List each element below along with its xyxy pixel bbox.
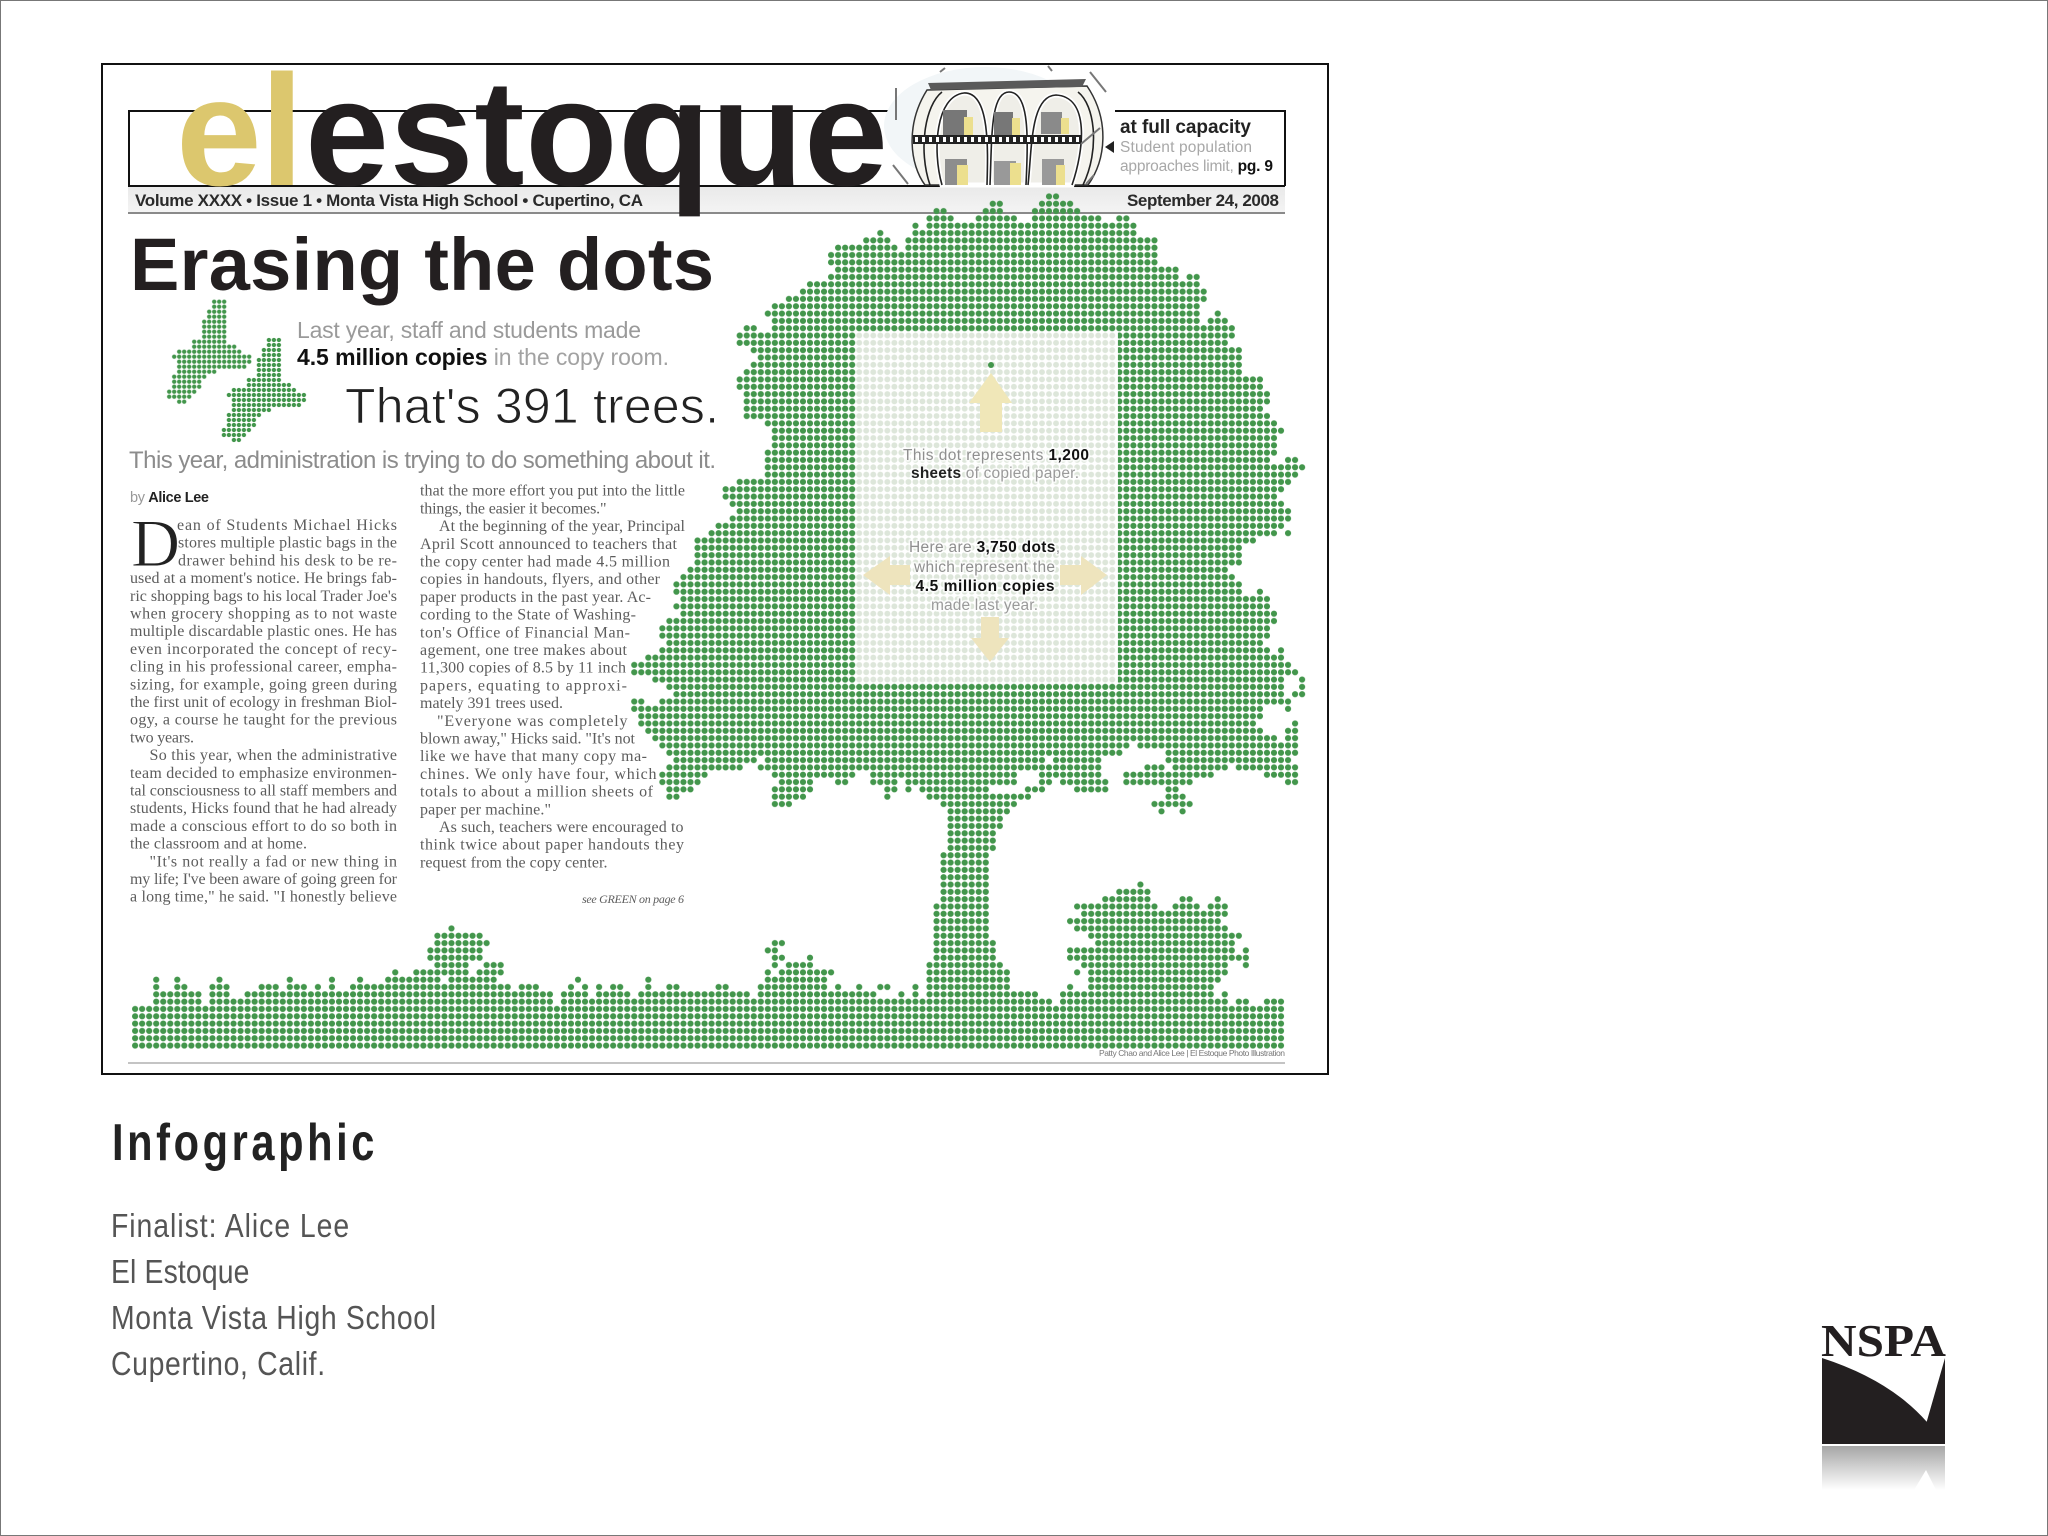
callout: 3,750 dots equal 4.5 million copies: made last year. xyxy=(931,597,1038,614)
article column two: that the more effort you put into the little xyxy=(420,483,685,500)
article column two: copies in handouts, flyers, and other xyxy=(420,571,661,588)
article column one: the first unit of ecology in freshman Biol- xyxy=(130,694,397,711)
volume and issue line: Volume XXXX • Issue 1 • Monta Vista High School • Cupertino, CA xyxy=(135,191,643,210)
bush dots xyxy=(1060,881,1249,998)
panel: newspaper page frame xyxy=(102,64,1328,1074)
article column one: ogy, a course he taught for the previous xyxy=(130,712,397,729)
panel: pale field of 3,750 dots xyxy=(856,332,1118,683)
teaser: at full capacity: Student population xyxy=(1120,139,1252,156)
article column two xyxy=(420,483,686,906)
article column one: So this year, when the administrative xyxy=(150,747,397,764)
arrow: up xyxy=(969,373,1012,432)
callout: one dot equals 1,200 sheets: This dot represents 1,200 xyxy=(903,447,1089,464)
article column two: like we have that many copy ma- xyxy=(420,748,647,765)
article column one: multiple discardable plastic ones. He has xyxy=(130,623,397,640)
teaser: at full capacity: approaches limit, pg. 9 xyxy=(1120,158,1273,175)
masthead box xyxy=(128,111,1285,214)
article column one: a long time," he said. "I honestly believe xyxy=(130,889,397,906)
article column one xyxy=(130,505,398,906)
arrow: down xyxy=(971,617,1009,662)
article column one: sizing, for example, going green during xyxy=(130,676,397,693)
arrow: right xyxy=(1060,556,1107,595)
article column two: April Scott announced to teachers that xyxy=(420,536,678,553)
drop cap: D xyxy=(131,505,180,581)
article column one: made a conscious effort to do so both in xyxy=(130,818,397,835)
callout: 3,750 dots equal 4.5 million copies: 4.5 million copies xyxy=(916,578,1054,595)
article column two: things, the easier it becomes." xyxy=(420,500,606,517)
article column one: cling in his professional career, empha- xyxy=(130,659,397,676)
tree trunk dots xyxy=(926,815,1038,998)
article column two: chines. We only have four, which xyxy=(420,766,656,783)
callout: one dot equals 1,200 sheets xyxy=(903,447,1089,482)
article column one: stores multiple plastic bags in the xyxy=(178,535,397,552)
article column two: think twice about paper handouts they xyxy=(420,837,684,854)
article column one: "It's not really a fad or new thing in xyxy=(150,853,397,870)
byline: by Alice Lee xyxy=(130,490,209,506)
article column two: blown away," Hicks said. "It's not xyxy=(420,730,636,748)
article column one: ric shopping bags to his local Trader Joe's xyxy=(130,588,397,605)
dot tree: crown, trunk, bush and ground xyxy=(132,193,1306,1049)
icon: falling dot leaf right xyxy=(221,338,306,442)
article column one: my life; I've been aware of going green for xyxy=(130,871,398,888)
article column one: two years. xyxy=(130,729,194,746)
teaser: at full capacity: at full capacity xyxy=(1120,117,1251,138)
ground and grass dots xyxy=(132,925,1285,1049)
headline: Erasing the dots xyxy=(130,223,714,306)
article column two: 11,300 copies of 8.5 by 11 inch xyxy=(420,660,626,677)
article column one: the classroom and at home. xyxy=(130,836,307,853)
bottom rule xyxy=(128,1062,1285,1064)
text block: finalist details: Cupertino, Calif. xyxy=(111,1345,325,1383)
article column two: As such, teachers were encouraged to xyxy=(439,819,684,836)
photo credit: Patty Chao and Alice Lee | El Estoque Photo Illustration xyxy=(1099,1048,1285,1058)
article column two: papers, equating to approxi- xyxy=(420,677,627,694)
deck: copies made last year: 4.5 million copies in the copy room. xyxy=(297,344,669,370)
article column two: cording to the State of Washing- xyxy=(420,607,636,624)
article column one: team decided to emphasize environmen- xyxy=(130,765,397,782)
article column two: At the beginning of the year, Principal xyxy=(439,518,686,535)
icon: falling dot leaf left xyxy=(167,299,252,404)
article column one: ean of Students Michael Hicks xyxy=(177,517,397,534)
icon: overcrowded school building illustration xyxy=(884,66,1106,185)
logo: NSPA: NSPA xyxy=(1821,1315,1946,1366)
teaser: at full capacity xyxy=(1105,117,1273,175)
article column two: totals to about a million sheets of xyxy=(420,784,654,801)
callout: 3,750 dots equal 4.5 million copies xyxy=(909,539,1060,614)
deck: this year: This year, administration is trying to do something about it. xyxy=(129,447,716,474)
text block: finalist details: El Estoque xyxy=(111,1253,249,1291)
heading: award category: Infographic xyxy=(112,1113,374,1171)
callout: 3,750 dots equal 4.5 million copies: Here are 3,750 dots, xyxy=(909,539,1060,556)
deck: 391 trees: That's 391 trees. xyxy=(345,378,719,434)
article column one: tal consciousness to all staff members and xyxy=(130,782,397,800)
logo: el Estoque nameplate: estoque xyxy=(305,48,888,217)
callout: 3,750 dots equal 4.5 million copies: which represent the xyxy=(913,559,1055,576)
article column two: mately 391 trees used. xyxy=(420,695,563,712)
article column one: when grocery shopping as to not waste xyxy=(130,606,397,622)
article column two: request from the copy center. xyxy=(420,854,608,871)
logo: NSPA xyxy=(1821,1315,1946,1490)
article column two: "Everyone was completely xyxy=(437,713,628,730)
logo: el Estoque nameplate: l xyxy=(260,43,304,219)
text block: finalist details xyxy=(111,1207,436,1383)
arrow: left xyxy=(863,556,910,595)
article column two: ton's Office of Financial Man- xyxy=(420,624,630,641)
article column two: the copy center had made 4.5 million xyxy=(420,554,670,570)
deck: copies made last year: Last year, staff and students made xyxy=(297,317,641,343)
single highlighted dot xyxy=(988,362,994,368)
logo: el Estoque nameplate: e xyxy=(176,46,262,218)
jump line: see GREEN on page 6 xyxy=(582,892,684,906)
article column two: paper products in the past year. Ac- xyxy=(420,589,651,606)
article column one: students, Hicks found that he had already xyxy=(130,800,397,817)
article column one: drawer behind his desk to be re- xyxy=(178,552,397,569)
article column two: agement, one tree makes about xyxy=(420,642,628,659)
article column one: even incorporated the concept of recy- xyxy=(130,641,397,658)
article column one: used at a moment's notice. He brings fab- xyxy=(130,570,397,587)
deck: copies made last year xyxy=(297,317,669,370)
tree crown dots xyxy=(631,193,1306,815)
article column two: paper per machine." xyxy=(420,801,551,818)
date: September 24, 2008 xyxy=(1127,191,1279,210)
text block: finalist details: Monta Vista High School xyxy=(111,1299,436,1337)
callout: one dot equals 1,200 sheets: sheets of copied paper. xyxy=(911,465,1079,482)
text block: finalist details: Finalist: Alice Lee xyxy=(111,1207,349,1245)
